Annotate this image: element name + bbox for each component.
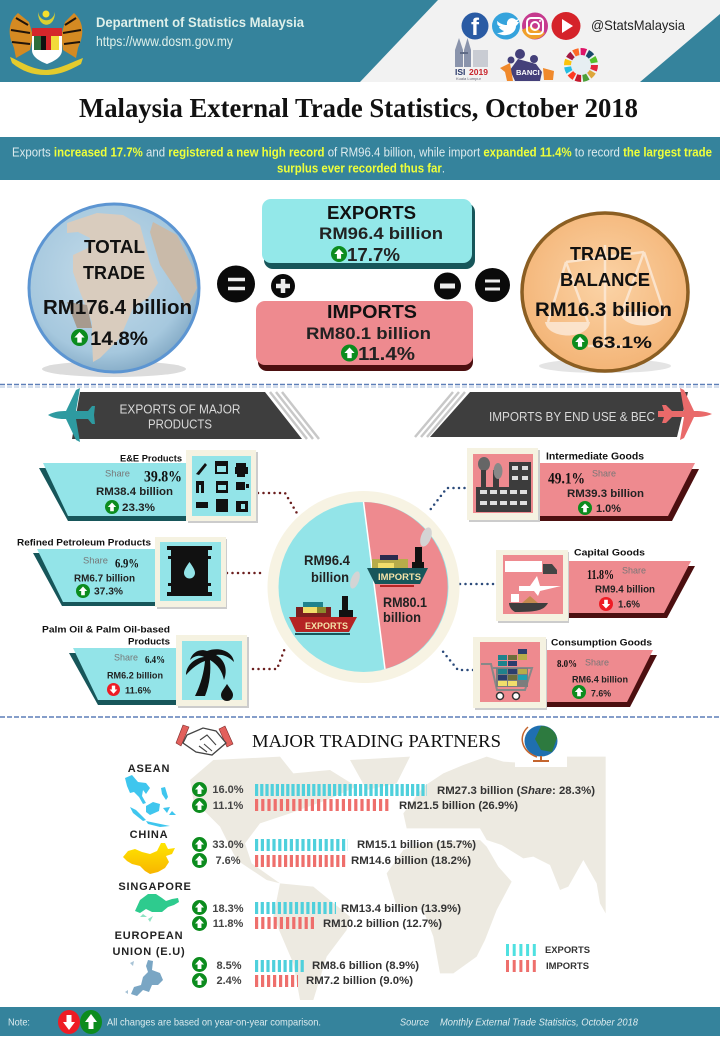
header organisation text: https://www.dosm.gov.my (96, 33, 233, 49)
card: refined petroleum: 37.3% (94, 586, 123, 598)
logo: sustainable development goals ring (568, 52, 594, 78)
card: palm oil: 11.6% (125, 686, 152, 696)
banner: imports by end use: IMPORTS BY END USE & BEC (489, 410, 655, 424)
pie chart: exports vs imports: RM80.1 (383, 594, 427, 610)
card: consumption goods: 7.6% (591, 688, 612, 700)
region: China rows: 33.0% (212, 839, 244, 851)
exports box: EXPORTS (327, 203, 416, 223)
banner: exports of major products: EXPORTS OF MAJOR (120, 402, 240, 416)
card: refined petroleum: Share (83, 556, 108, 566)
icon: teal plane (48, 388, 95, 442)
logo: ISI 2019: Kuala Lumpur (456, 76, 482, 81)
card: palm oil: 6.4% (145, 655, 165, 666)
logo: ISI 2019: 2019 (469, 67, 488, 77)
icon: imports ship: IMPORTS (378, 572, 421, 582)
connectors: imports (430, 488, 497, 670)
card: capital goods: Share (622, 566, 646, 576)
pie chart: exports vs imports: billion (311, 569, 349, 585)
region: European Union: UNION (E.U) (113, 946, 185, 958)
banner: exports of major products: PRODUCTS (148, 418, 212, 432)
imports box: RM80.1 billion (306, 324, 431, 343)
region: Singapore rows: 11.8% (213, 918, 244, 930)
card: consumption goods: 8.0% (557, 659, 577, 670)
pie chart: exports vs imports (268, 491, 460, 683)
icon: imports ship (367, 526, 434, 587)
footer band: Monthly External Trade Statistics, October 2018 (440, 1016, 638, 1028)
region: Singapore rows: RM13.4 billion (13.9%) (341, 903, 461, 915)
banner: imports by end use (415, 392, 688, 437)
header band (0, 0, 720, 82)
world map background (190, 757, 606, 1000)
card: intermediate goods: 49.1% (548, 470, 585, 488)
region: ASEAN rows (192, 782, 595, 813)
exports box: RM96.4 billion (319, 224, 443, 243)
region: European Union rows (192, 957, 419, 988)
region: Singapore: SINGAPORE (118, 881, 192, 893)
footer band: All changes are based on year-on-year comparison. (107, 1016, 321, 1028)
card: consumption goods (473, 637, 657, 710)
icon: Malaysia coat of arms (10, 10, 83, 75)
card: palm oil: RM6.2 billion (107, 670, 163, 682)
region: ASEAN rows: 16.0% (212, 784, 244, 796)
total trade text: 14.8% (90, 329, 148, 350)
region: European Union (113, 930, 185, 996)
card: palm oil: Palm Oil & Palm Oil-based (42, 624, 170, 636)
region: European Union rows: 2.4% (216, 975, 242, 987)
card: intermediate goods: Intermediate Goods (546, 452, 644, 462)
logo: Banci Malaysia: BANCI (516, 68, 540, 77)
card: consumption goods: Share (585, 658, 609, 668)
card: E&E products: 23.3% (122, 502, 155, 514)
legend (506, 945, 590, 971)
card: E&E products: E&E Products (120, 454, 182, 464)
card: palm oil: Share (114, 652, 138, 664)
region: Singapore rows (192, 900, 461, 931)
trade balance text (535, 244, 672, 352)
card: E&E products (39, 450, 258, 523)
card: E&E products: Share (105, 468, 130, 480)
footer band: Source (400, 1016, 429, 1028)
card: intermediate goods: Share (592, 468, 616, 480)
banner: exports of major products (72, 392, 319, 439)
social media handle: @StatsMalaysia (591, 17, 685, 33)
trade balance text: 63.1% (592, 333, 652, 352)
imports box: 11.4% (358, 344, 415, 364)
region: ASEAN rows: 11.1% (213, 800, 244, 812)
region: ASEAN rows: RM27.3 billion (Share: 28.3%) (437, 785, 595, 797)
summary band (0, 137, 720, 180)
region: European Union rows: RM7.2 billion (9.0%) (306, 975, 413, 987)
footer band: Note: (8, 1016, 30, 1028)
connectors: exports (227, 493, 298, 669)
legend: EXPORTS (545, 945, 590, 955)
region: ASEAN: ASEAN (128, 763, 170, 775)
exports box (262, 199, 475, 269)
social media icons (462, 12, 580, 41)
region: ASEAN (125, 763, 176, 827)
operator symbols (217, 266, 510, 302)
summary band: surplus ever recorded thus far. (277, 160, 445, 176)
card: capital goods (496, 548, 695, 623)
header organisation text: Department of Statistics Malaysia (96, 14, 304, 30)
globe: total trade (29, 204, 199, 377)
icon: exports ship: EXPORTS (305, 621, 348, 631)
trade balance text: RM16.3 billion (535, 300, 672, 321)
card: capital goods: 11.8% (587, 567, 614, 582)
card: capital goods: 1.6% (618, 600, 640, 610)
card: palm oil: Products (128, 636, 170, 648)
card: intermediate goods: 1.0% (596, 503, 621, 515)
icon: globe (515, 722, 567, 767)
region: European Union rows: 8.5% (216, 960, 242, 972)
pie chart: exports vs imports: billion (383, 609, 421, 625)
region: China rows (192, 837, 476, 868)
card: refined petroleum: RM6.7 billion (74, 574, 135, 584)
total trade text: TRADE (83, 263, 145, 283)
logo: Banci Malaysia (500, 49, 554, 81)
region: European Union: EUROPEAN (115, 930, 183, 942)
pie chart: exports vs imports: RM96.4 (304, 552, 350, 568)
card: intermediate goods (467, 448, 699, 522)
trade balance text: BALANCE (560, 270, 650, 290)
total trade text: TOTAL (84, 237, 145, 257)
trade balance text: TRADE (570, 244, 632, 264)
icon: handshake (176, 725, 233, 755)
heading: major trading partners: MAJOR TRADING PARTNERS (252, 731, 501, 751)
exports box: 17.7% (347, 245, 400, 265)
card: capital goods: Capital Goods (574, 548, 645, 558)
region: European Union rows: RM8.6 billion (8.9%) (312, 960, 419, 972)
social media icons: f (471, 14, 480, 41)
region: China rows: 7.6% (215, 855, 241, 867)
icon: exports ship (289, 570, 362, 635)
legend: IMPORTS (546, 961, 589, 971)
icon: red plane (658, 388, 712, 440)
balance circle (522, 213, 688, 373)
region: China: CHINA (130, 829, 168, 841)
header organisation text (96, 14, 304, 49)
footer band (0, 1007, 720, 1036)
total trade text: RM176.4 billion (43, 297, 192, 319)
region: China rows: RM14.6 billion (18.2%) (351, 855, 471, 867)
card: consumption goods: RM6.4 billion (572, 674, 628, 686)
imports box (256, 301, 473, 371)
card: refined petroleum (17, 537, 227, 609)
logo: ISI 2019 (455, 38, 488, 81)
card: refined petroleum: 6.9% (115, 556, 139, 570)
summary band: Exports increased 17.7% and registered a new high record of RM96.4 billion, while import expanded 11.4% to record the largest trade (12, 144, 712, 160)
card: capital goods: RM9.4 billion (595, 584, 655, 596)
region: Singapore rows: RM10.2 billion (12.7%) (323, 918, 442, 930)
title: Malaysia External Trade Statistics, October 2018 (79, 93, 638, 123)
region: Singapore (118, 881, 192, 922)
region: Singapore rows: 18.3% (212, 903, 244, 915)
region: China (123, 829, 175, 874)
total trade text (43, 237, 192, 350)
card: consumption goods: Consumption Goods (551, 638, 652, 648)
card: refined petroleum: Refined Petroleum Products (17, 538, 151, 548)
region: ASEAN rows: RM21.5 billion (26.9%) (399, 800, 518, 812)
card: intermediate goods: RM39.3 billion (567, 488, 644, 500)
logo: ISI 2019: ISI (455, 67, 465, 77)
region: China rows: RM15.1 billion (15.7%) (357, 839, 476, 851)
card: palm oil (42, 624, 249, 708)
card: E&E products: RM38.4 billion (96, 486, 173, 498)
imports box: IMPORTS (327, 302, 417, 322)
card: E&E products: 39.8% (144, 468, 182, 486)
